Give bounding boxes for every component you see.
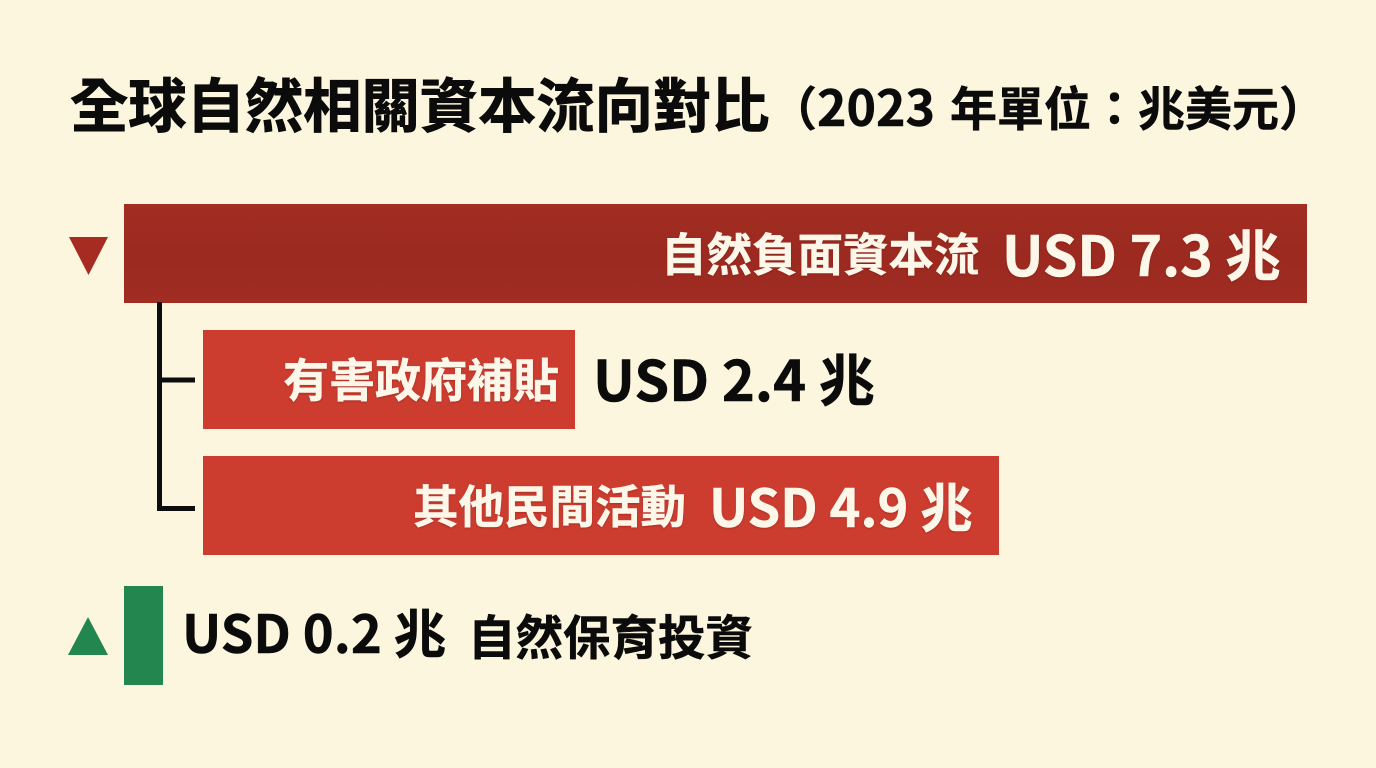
- label: conservation investment: 自然保育投資: [468, 600, 753, 669]
- title unit note: year: （2023: [770, 69, 935, 141]
- bar: harmful government subsidies: [203, 330, 575, 429]
- bar label: private activities: 其他民間活動: [413, 471, 686, 537]
- bar: nature-negative capital flows: [124, 204, 1307, 303]
- icon: down triangle: [69, 237, 108, 275]
- bar: other private activities: [203, 456, 999, 555]
- label: conservation value and name: [182, 593, 753, 669]
- title unit note: unit: 年單位：兆美元）: [950, 71, 1326, 140]
- bar label: subsidies: 有害政府補貼: [283, 345, 559, 411]
- bar label: nature-negative: 自然負面資本流: [661, 219, 980, 285]
- value: 0.2: USD 0.2 兆: [182, 593, 446, 669]
- bar value: 4.9: USD 4.9 兆: [709, 467, 973, 543]
- icon: up triangle: [68, 617, 108, 655]
- connector tree: [157, 302, 195, 511]
- bar: nature conservation investment: [124, 586, 163, 685]
- bar value: 7.3: USD 7.3 兆: [1002, 212, 1281, 292]
- value: subsidies: USD 2.4 兆: [593, 337, 875, 418]
- title: [70, 59, 1326, 144]
- title main text: 全球自然相關資本流向對比: [70, 59, 770, 144]
